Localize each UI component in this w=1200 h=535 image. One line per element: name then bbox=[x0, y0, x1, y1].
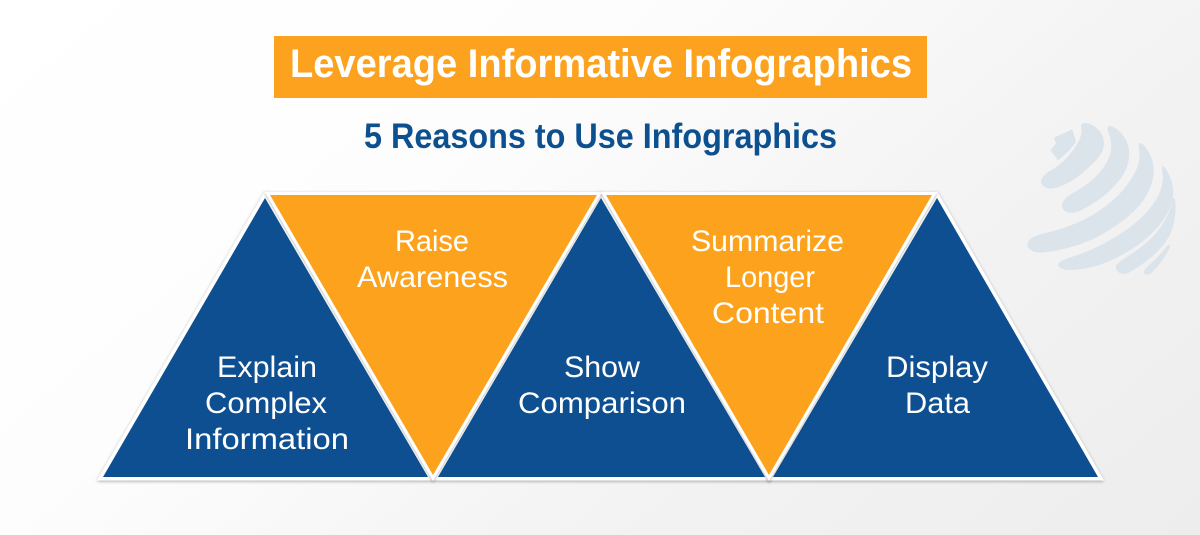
triangle: Display Data: Display bbox=[886, 351, 988, 384]
triangle: Summarize Longer Content: Content bbox=[712, 297, 825, 330]
triangle: Raise Awareness bbox=[270, 195, 597, 475]
triangle: Explain Complex Information: Explain bbox=[217, 351, 317, 384]
triangle: Explain Complex Information: Information bbox=[185, 423, 349, 456]
triangle: Show Comparison bbox=[438, 198, 765, 477]
icon: watermark globe bbox=[1029, 124, 1175, 274]
triangle: Explain Complex Information: Complex bbox=[205, 387, 327, 420]
title banner bbox=[274, 36, 927, 98]
subtitle: 5 Reasons to Use Infographics bbox=[364, 117, 837, 156]
title banner: Leverage Informative Infographics bbox=[290, 42, 912, 86]
triangle: Display Data: Data bbox=[905, 387, 970, 420]
triangle: Show Comparison: Comparison bbox=[518, 387, 686, 420]
triangle: Summarize Longer Content: Longer bbox=[725, 261, 815, 294]
triangle: Summarize Longer Content bbox=[606, 195, 932, 475]
triangle: Raise Awareness: Raise bbox=[395, 225, 469, 258]
triangle: Raise Awareness: Awareness bbox=[357, 261, 508, 294]
triangle: Explain Complex Information bbox=[103, 198, 428, 477]
triangle: Summarize Longer Content: Summarize bbox=[691, 225, 844, 258]
triangle: Show Comparison: Show bbox=[564, 351, 640, 384]
triangle: Display Data bbox=[773, 198, 1098, 477]
